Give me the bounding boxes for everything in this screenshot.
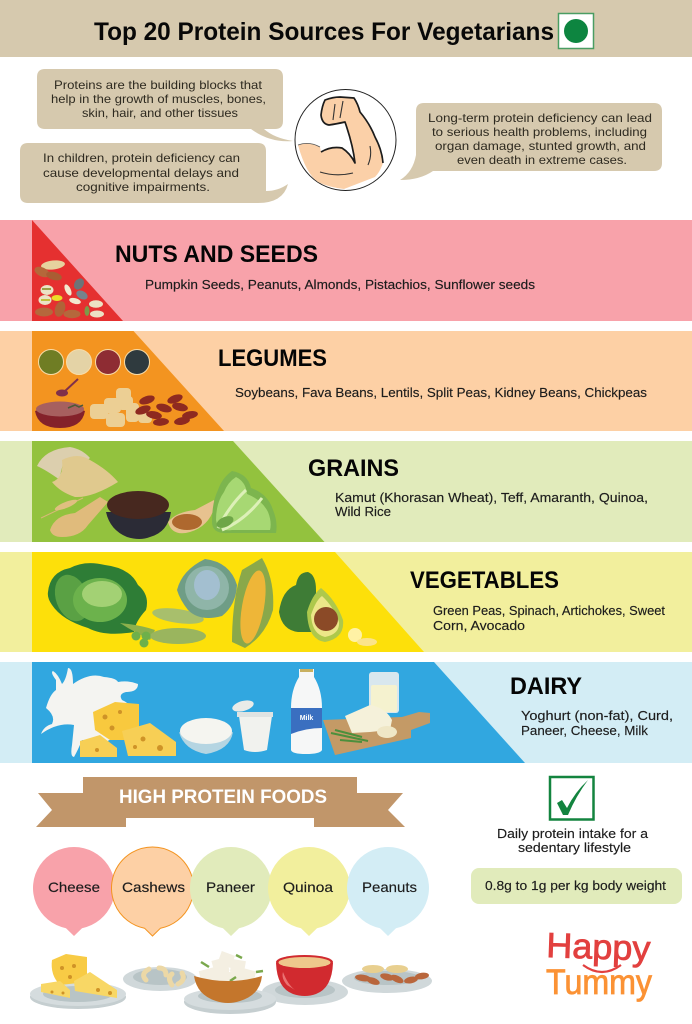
food: cashews plate bbox=[123, 967, 197, 991]
callout: daily amount: 0.8g to 1g per kg body weight bbox=[485, 878, 666, 893]
text: daily protein intake: Daily protein intake for a bbox=[497, 826, 649, 841]
text: vegetables list: Corn, Avocado bbox=[433, 618, 525, 633]
food: cheese plate bbox=[30, 954, 126, 1009]
callout: long-term deficiency: to serious health problems, including bbox=[432, 125, 647, 139]
heading: GRAINS bbox=[308, 455, 399, 482]
callout: building blocks: skin, hair, and other tissues bbox=[82, 106, 238, 120]
callout: children bbox=[20, 143, 288, 203]
text: vegetables list bbox=[433, 603, 665, 633]
text: vegetables list: Green Peas, Spinach, Artichokes, Sweet bbox=[433, 603, 665, 618]
logo: Happy Tummy bbox=[546, 926, 652, 1002]
callout: building blocks: help in the growth of muscles, bones, bbox=[51, 92, 266, 106]
bubble: peanuts: Peanuts bbox=[362, 879, 417, 895]
text: daily protein intake: sedentary lifestyle bbox=[518, 840, 631, 855]
text: grains list: Kamut (Khorasan Wheat), Teff, Amaranth, Quinoa, bbox=[335, 490, 648, 505]
bubble: cashews: Cashews bbox=[122, 879, 185, 895]
icon: flexed arm bbox=[295, 90, 396, 190]
heading: NUTS AND SEEDS bbox=[115, 241, 318, 268]
text: grains list: Wild Rice bbox=[335, 504, 391, 519]
food: peanuts plate bbox=[342, 965, 432, 993]
heading: LEGUMES bbox=[218, 345, 327, 372]
bubble: paneer: Paneer bbox=[206, 879, 255, 895]
callout: long-term deficiency bbox=[400, 103, 662, 180]
bubble: paneer bbox=[190, 847, 272, 936]
callout: children: cognitive impairments. bbox=[76, 180, 210, 194]
icon: vegetarian mark bbox=[558, 14, 594, 48]
icon: grains bbox=[37, 447, 277, 539]
title: Top 20 Protein Sources For Vegetarians bbox=[94, 18, 554, 46]
bubble: peanuts bbox=[347, 847, 429, 936]
bubble: quinoa bbox=[268, 847, 350, 936]
bubble: cashews bbox=[111, 847, 194, 936]
bubble: quinoa: Quinoa bbox=[283, 879, 333, 895]
bubble: cheese: Cheese bbox=[48, 879, 100, 895]
icon: legumes bbox=[35, 350, 199, 428]
text: nuts list: Pumpkin Seeds, Peanuts, Almonds, Pistachios, Sunflower seeds bbox=[145, 277, 536, 292]
text: grains list bbox=[335, 490, 648, 519]
callout: building blocks: Proteins are the building blocks that bbox=[54, 78, 263, 92]
text: dairy list bbox=[521, 708, 673, 738]
callout: building blocks bbox=[37, 69, 293, 141]
logo: Happy Tummy: Happy bbox=[546, 926, 652, 969]
icon: dairy bbox=[41, 668, 430, 757]
icon: dairy: Milk bbox=[300, 715, 313, 722]
food: paneer bowl bbox=[184, 951, 276, 1014]
callout: daily amount bbox=[471, 868, 682, 904]
text: dairy list: Yoghurt (non-fat), Curd, bbox=[521, 708, 673, 723]
heading: VEGETABLES bbox=[410, 567, 559, 594]
callout: children: In children, protein deficiency can bbox=[43, 151, 240, 165]
callout: long-term deficiency: even death in extreme cases. bbox=[457, 153, 627, 167]
panel: grains bbox=[0, 441, 692, 542]
text: legumes list: Soybeans, Fava Beans, Lentils, Split Peas, Kidney Beans, Chickpeas bbox=[235, 385, 648, 400]
panel: vegetables bbox=[0, 552, 692, 652]
text: daily protein intake bbox=[497, 826, 649, 855]
panel: dairy bbox=[0, 662, 692, 763]
bubble: cheese bbox=[33, 847, 115, 936]
logo: Happy Tummy: Tummy bbox=[546, 963, 652, 1002]
panel: nuts and seeds bbox=[0, 220, 692, 321]
heading: DAIRY bbox=[510, 673, 582, 700]
banner: high protein foods: HIGH PROTEIN FOODS bbox=[119, 787, 327, 808]
banner: high protein foods bbox=[36, 777, 405, 827]
callout: long-term deficiency: Long-term protein deficiency can lead bbox=[428, 111, 652, 125]
header band bbox=[0, 0, 692, 57]
callout: long-term deficiency: organ damage, stunted growth, and bbox=[435, 139, 646, 153]
icon: nuts bbox=[33, 259, 104, 318]
text: dairy list: Paneer, Cheese, Milk bbox=[521, 723, 648, 738]
callout: children: cause developmental delays and bbox=[43, 166, 239, 180]
icon: green check box bbox=[550, 777, 594, 820]
icon: vegetables bbox=[48, 558, 377, 648]
food: quinoa bowl bbox=[262, 955, 348, 1005]
panel: legumes bbox=[0, 331, 692, 431]
